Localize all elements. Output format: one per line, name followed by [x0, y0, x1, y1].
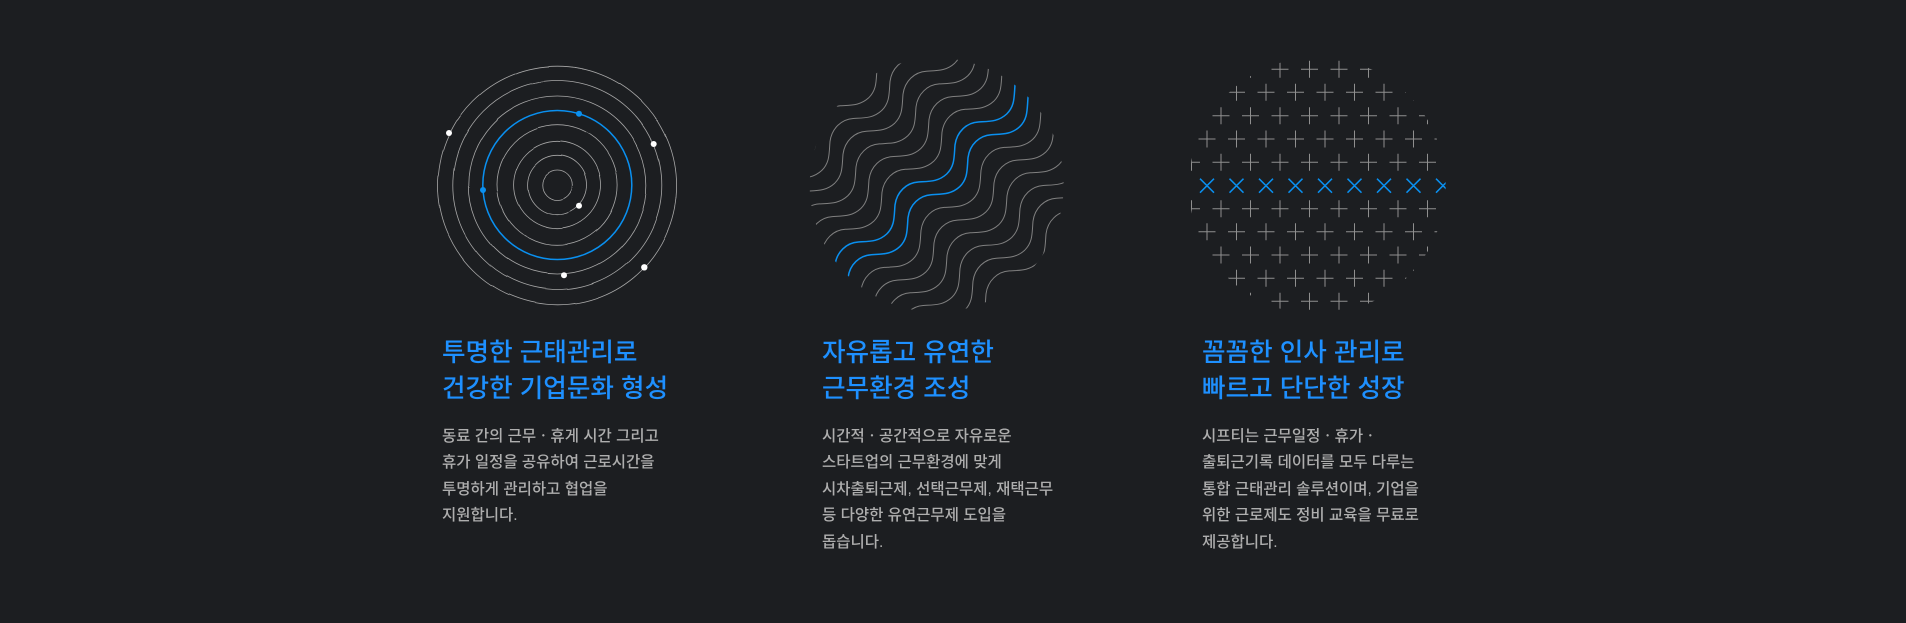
- text block: column 3: 제공합니다.: [1202, 534, 1278, 551]
- heading: column 3: [1202, 339, 1405, 403]
- heading: column 1: 건강한 기업문화 형성: [442, 375, 668, 403]
- heading: column 2: 자유롭고 유연한: [822, 339, 994, 367]
- heading: column 1: 투명한 근태관리로: [442, 339, 637, 367]
- text block: column 1: 지원합니다.: [442, 507, 518, 524]
- text block: column 3: [1202, 428, 1419, 551]
- text block: column 2: 시차출퇴근제, 선택근무제, 재택근무: [822, 481, 1053, 498]
- text block: column 3: 시프티는 근무일정ㆍ휴가ㆍ: [1202, 428, 1377, 444]
- icon: wavy lines: [810, 60, 1064, 310]
- heading: column 2: 근무환경 조성: [822, 375, 970, 403]
- heading: column 2: [822, 339, 994, 403]
- text block: column 1: 동료 간의 근무ㆍ휴게 시간 그리고: [442, 428, 659, 444]
- text block: column 1: [442, 428, 659, 524]
- text block: column 3: 위한 근로제도 정비 교육을 무료로: [1202, 507, 1419, 524]
- text block: column 3: 통합 근태관리 솔루션이며, 기업을: [1202, 481, 1419, 498]
- text block: column 2: [822, 428, 1053, 551]
- text block: column 1: 투명하게 관리하고 협업을: [442, 481, 607, 498]
- heading: column 3: 빠르고 단단한 성장: [1202, 375, 1405, 403]
- icon: concentric circles: [438, 66, 677, 305]
- text block: column 2: 돕습니다.: [822, 534, 883, 551]
- text block: column 1: 휴가 일정을 공유하여 근로시간을: [442, 454, 655, 471]
- text block: column 2: 등 다양한 유연근무제 도입을: [822, 507, 1006, 524]
- heading: column 1: [442, 339, 668, 403]
- heading: column 3: 꼼꼼한 인사 관리로: [1202, 339, 1405, 367]
- text block: column 2: 시간적ㆍ공간적으로 자유로운: [822, 428, 1012, 444]
- text block: column 2: 스타트업의 근무환경에 맞게: [822, 454, 1002, 471]
- text block: column 3: 출퇴근기록 데이터를 모두 다루는: [1202, 454, 1415, 471]
- icon: plus grid with blue crosses: [1191, 60, 1446, 310]
